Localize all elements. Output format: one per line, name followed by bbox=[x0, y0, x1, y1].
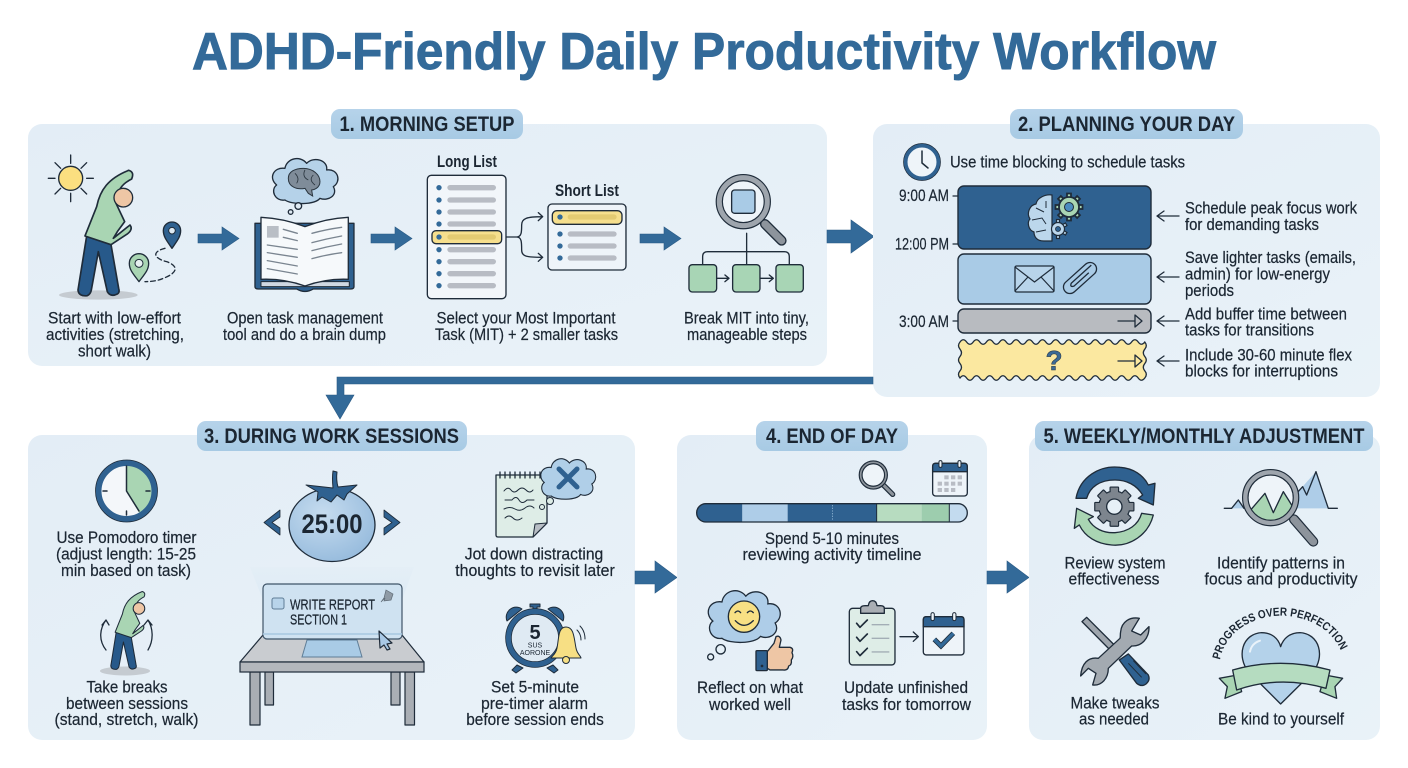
icon: stretching figure bbox=[100, 591, 152, 676]
text: tweaks: as needed bbox=[1079, 710, 1149, 728]
time labels: 3:00 AM bbox=[899, 312, 949, 331]
icon: tomato timer: 25:00 bbox=[302, 509, 362, 539]
heading: planning your day bbox=[1010, 109, 1243, 139]
text: pomodoro bbox=[56, 528, 197, 580]
text: select MIT bbox=[435, 308, 618, 344]
text: breaks bbox=[54, 678, 198, 729]
text: break MIT: Break MIT into tiny, bbox=[684, 308, 809, 328]
text: select MIT: Select your Most Important bbox=[436, 308, 616, 328]
text: select MIT: Task (MIT) + 2 smaller tasks bbox=[435, 325, 618, 344]
text: review effectiveness bbox=[1064, 554, 1166, 588]
panel: 4. end of day bbox=[677, 421, 987, 740]
text: review timeline: reviewing activity timeline bbox=[742, 545, 922, 564]
text: pomodoro: Use Pomodoro timer bbox=[56, 528, 197, 547]
text: breaks: (stand, stretch, walk) bbox=[54, 710, 198, 729]
icon: alarm clock with bell: SUS bbox=[528, 642, 543, 650]
block: peak focus bbox=[958, 186, 1151, 249]
text: block notes: Include 30-60 minute flex bbox=[1185, 346, 1353, 364]
icon: clock bbox=[904, 144, 940, 180]
text: identify patterns bbox=[1204, 554, 1358, 588]
icon: heart with banner and arched slogan: PROGRESS OVER PERFECTION bbox=[1212, 608, 1348, 660]
text: tweaks: Make tweaks bbox=[1070, 694, 1160, 712]
heading: end of day bbox=[756, 421, 908, 451]
text: reflect bbox=[697, 678, 803, 714]
text: block notes: periods bbox=[1185, 282, 1234, 300]
text: jot down: thoughts to revisit later bbox=[455, 561, 615, 580]
text: update tasks bbox=[842, 678, 972, 714]
icon: clipboard to calendar bbox=[849, 601, 964, 665]
icon: long list and short list bbox=[427, 175, 626, 299]
arrow bbox=[640, 227, 681, 250]
icon: desk with monitor bbox=[240, 567, 424, 725]
arrow: panel 3 to panel 4 bbox=[635, 561, 677, 593]
arrow: panel 1 to panel 2 bbox=[827, 220, 874, 253]
text: be kind: Be kind to yourself bbox=[1218, 710, 1344, 728]
text: review timeline: Spend 5-10 minutes bbox=[765, 529, 899, 548]
heading: planning your day: 2. PLANNING YOUR DAY bbox=[1018, 113, 1235, 136]
text: block notes bbox=[1185, 200, 1358, 380]
text: block notes: Add buffer time between bbox=[1185, 306, 1347, 324]
icon: pomodoro clock bbox=[96, 460, 158, 522]
text: pre-timer alarm bbox=[466, 678, 604, 729]
text: break MIT: manageable steps bbox=[687, 325, 807, 344]
text: update tasks: tasks for tomorrow bbox=[842, 695, 972, 714]
text: block notes: for demanding tasks bbox=[1185, 216, 1319, 234]
time labels: 9:00 AM bbox=[899, 186, 949, 205]
text: low-effort activities bbox=[46, 308, 184, 360]
icon: smiley thought cloud with thumbs up bbox=[708, 591, 793, 671]
icon: magnifier and task breakdown bbox=[689, 178, 803, 292]
heading: weekly/monthly adjustment bbox=[1035, 421, 1373, 451]
icon: notepad with thought cloud bbox=[496, 459, 596, 537]
text: reflect: worked well bbox=[708, 695, 791, 714]
text: jot down: Jot down distracting bbox=[465, 544, 603, 564]
icon: magnifier over pattern chart bbox=[1224, 472, 1337, 542]
arrow: panel 2 to panel 3 connector bbox=[326, 377, 873, 419]
heading: end of day: 4. END OF DAY bbox=[766, 425, 898, 448]
heading: during work sessions: 3. DURING WORK SESSIONS bbox=[204, 425, 459, 448]
text: block notes: Schedule peak focus work bbox=[1185, 200, 1358, 218]
heading: morning setup: 1. MORNING SETUP bbox=[340, 113, 514, 136]
text: pre-timer alarm: Set 5-minute bbox=[491, 678, 579, 696]
text: brain dump bbox=[223, 308, 386, 344]
icon: heart with banner and arched slogan bbox=[1212, 608, 1348, 705]
text: tweaks bbox=[1070, 694, 1160, 728]
text: update tasks: Update unfinished bbox=[844, 678, 968, 697]
text: reflect: Reflect on what bbox=[697, 678, 803, 697]
arrow bbox=[371, 227, 412, 250]
icon: magnifier and calendar bbox=[861, 461, 967, 496]
text: pomodoro: min based on task) bbox=[61, 561, 191, 580]
text: low-effort activities: activities (stretching, bbox=[46, 325, 184, 344]
text: review timeline bbox=[742, 529, 922, 564]
text: breaks: between sessions bbox=[66, 694, 188, 713]
arrow: panel 4 to panel 5 bbox=[987, 561, 1029, 593]
title: ADHD-Friendly Daily Productivity Workflow bbox=[192, 23, 1217, 81]
text: breaks: Take breaks bbox=[86, 678, 168, 696]
text: identify patterns: focus and productivity bbox=[1204, 570, 1358, 588]
text: pre-timer alarm: before session ends bbox=[466, 710, 604, 729]
label: short list: Short List bbox=[555, 182, 619, 200]
panel: 5. weekly/monthly adjustment bbox=[1029, 421, 1380, 740]
panel: 2. planning your day bbox=[873, 109, 1380, 397]
panel: 3. during work sessions bbox=[28, 421, 635, 740]
panel: 1. morning setup bbox=[28, 109, 827, 366]
text: brain dump: Open task management bbox=[227, 308, 383, 328]
chart: activity timeline bbox=[697, 504, 967, 522]
label: long list: Long List bbox=[437, 153, 497, 171]
text: identify patterns: Identify patterns in bbox=[1217, 554, 1345, 572]
text: low-effort activities: Start with low-effort bbox=[48, 308, 181, 328]
icon: review cycle with gear bbox=[1074, 467, 1155, 545]
icon: stretching figure with sun and route bbox=[48, 155, 181, 300]
text: review effectiveness: effectiveness bbox=[1068, 570, 1160, 588]
heading: during work sessions bbox=[197, 421, 467, 451]
heading: weekly/monthly adjustment: 5. WEEKLY/MONTHLY ADJUSTMENT bbox=[1044, 425, 1365, 448]
icon: desk with monitor: WRITE REPORT bbox=[290, 596, 375, 614]
text: pomodoro: (adjust length: 15-25 bbox=[56, 544, 196, 564]
block: flex time bbox=[958, 340, 1146, 380]
text: block notes: admin) for low-energy bbox=[1185, 266, 1331, 284]
text: break MIT bbox=[684, 308, 809, 344]
icon: desk with monitor: SECTION 1 bbox=[290, 612, 347, 628]
text: low-effort activities: short walk) bbox=[78, 342, 151, 360]
block: lighter tasks bbox=[958, 254, 1151, 304]
heading: morning setup bbox=[331, 109, 523, 139]
icon: tomato timer bbox=[264, 471, 400, 562]
text: pre-timer alarm: pre-timer alarm bbox=[481, 694, 588, 713]
icon: alarm clock with bell: 5 bbox=[529, 622, 541, 644]
arrow bbox=[198, 227, 239, 250]
text: block notes: blocks for interruptions bbox=[1185, 362, 1338, 380]
text: time blocking: Use time blocking to schedule tasks bbox=[950, 152, 1185, 172]
text: block notes: tasks for transitions bbox=[1185, 322, 1314, 340]
block: buffer time bbox=[958, 309, 1151, 333]
icon: wrench and screwdriver bbox=[1081, 617, 1149, 685]
icon: alarm clock with bell bbox=[506, 604, 585, 673]
time labels bbox=[895, 186, 958, 331]
icon: alarm clock with bell: AORONE bbox=[520, 650, 550, 657]
text: review effectiveness: Review system bbox=[1064, 554, 1166, 572]
arrows pointing to block notes bbox=[1157, 211, 1179, 366]
text: jot down bbox=[455, 544, 615, 580]
text: brain dump: tool and do a brain dump bbox=[223, 325, 386, 344]
time labels: 12:00 PM bbox=[895, 234, 949, 254]
text: block notes: Save lighter tasks (emails, bbox=[1185, 249, 1356, 267]
block: flex time: ? bbox=[1045, 345, 1063, 376]
icon: open book with brain thought cloud bbox=[255, 159, 354, 291]
